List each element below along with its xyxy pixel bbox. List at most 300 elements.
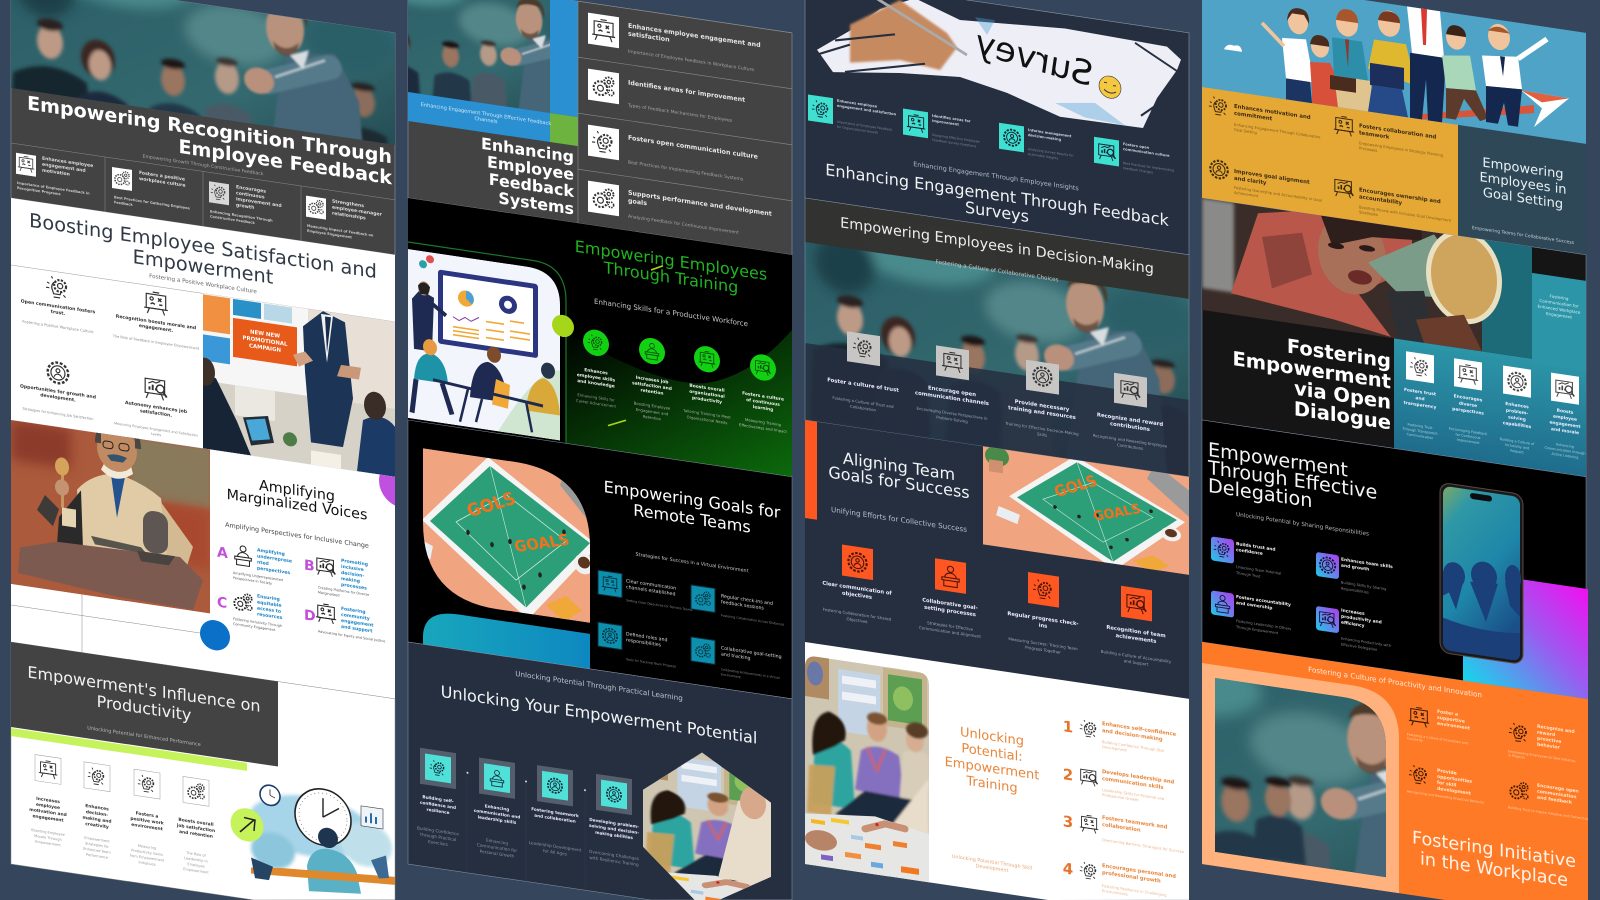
- subtitle: Enhancing Engagement Through Effective Feedback: [421, 102, 551, 127]
- cards row: improvement and: [236, 196, 282, 209]
- option B: processes: [341, 582, 367, 592]
- subtitle: Channels: [474, 116, 498, 125]
- item: open communication: Fostering a Positive Workplace Culture: [22, 320, 94, 334]
- item 1: Unlocking Team Potential: [1236, 565, 1281, 576]
- item 2: [83, 762, 111, 860]
- point 3: Fosters teamwork and: [1102, 815, 1168, 831]
- subtitle: Unlocking Potential by Sharing Responsibilities: [1236, 512, 1369, 538]
- item 2: Encouraging Diverse Perspectives in: [917, 406, 988, 421]
- card 2: Feedback Survey Questions: [932, 138, 977, 148]
- card 4: [1094, 137, 1174, 178]
- slide: Boosting Employee Satisfaction: [11, 198, 395, 477]
- item 1: confidence: [1236, 547, 1263, 557]
- item 4: employee: [1553, 413, 1577, 423]
- item 3: [1211, 590, 1291, 637]
- item 4: and Support: [1124, 658, 1149, 667]
- item 3: Fosters accountability: [1236, 594, 1291, 608]
- item 3: Initiatives: [138, 860, 156, 867]
- item 2: [1316, 552, 1393, 598]
- step 4: with Resilience Training: [589, 855, 639, 867]
- item 1: Increases: [36, 796, 60, 805]
- option A: perspectives: [257, 565, 290, 576]
- side note: Fostering: [1550, 293, 1569, 301]
- step 3: organizational: [689, 389, 725, 400]
- blue dot: [200, 618, 230, 652]
- item 4: Collaborative goal-setting: [721, 645, 782, 660]
- cards row: Strengthens: [332, 199, 364, 209]
- point 2: Develops leadership and: [1102, 769, 1175, 786]
- cards row: growth: [236, 202, 254, 211]
- title: Empowerment: [945, 755, 1039, 784]
- item: open communication: Open communication fosters: [21, 298, 95, 315]
- title: Through Training: [603, 258, 738, 297]
- item 3: Enhances: [1505, 401, 1529, 410]
- point 3: Overcoming Barriers: Strategies for Success: [1102, 838, 1184, 854]
- item 2: feedback sessions: [721, 599, 764, 612]
- subtitle: Unlocking Potential Through Practical Learning: [515, 669, 683, 703]
- slide: Aligning Team Goals for Success: [805, 420, 1189, 699]
- item 4: Recognition of team: [1106, 625, 1166, 639]
- item 4: [1101, 583, 1172, 670]
- option A: nted: [257, 559, 269, 567]
- subtitle: Fostering a Positive Workplace Culture: [149, 273, 257, 295]
- item 4: [1335, 179, 1452, 228]
- card 1: Enhances employee engagement and: [628, 23, 761, 49]
- photo: goals board: GOLS: [1051, 471, 1100, 501]
- step 1: [576, 327, 617, 409]
- item 1: Fosters trust: [1404, 387, 1436, 398]
- title: Amplifying: [259, 478, 335, 505]
- item 1: [1407, 704, 1471, 750]
- item 4: Effective Delegation: [1341, 643, 1377, 652]
- card 3: Informs management: [1028, 128, 1072, 138]
- item: autonomy: Levels: [151, 432, 161, 437]
- step 4: [739, 351, 787, 434]
- photo: workshop in hexagon: [643, 752, 771, 900]
- illustration: survey brush banner: Survey: [973, 23, 1095, 95]
- step 4: learning: [753, 404, 773, 413]
- item 3: ins: [1039, 623, 1047, 630]
- item 1: Creativity: [1407, 736, 1423, 743]
- step 1: Enhances: [584, 367, 608, 377]
- item 1: engagement: [32, 813, 64, 824]
- option D: engagement: [341, 618, 374, 629]
- option C: C: [217, 595, 227, 612]
- cards row: Enhances employee: [42, 156, 93, 169]
- purple corner circle: [379, 474, 395, 506]
- item 1: commitment: [1234, 111, 1273, 122]
- step 1: Through Practical: [419, 832, 456, 842]
- step 1: Building Confidence: [417, 825, 459, 837]
- card 2: [588, 69, 745, 126]
- item 3: Inclusivity and: [1505, 443, 1529, 450]
- title: Employee Feedback: [178, 135, 393, 190]
- subtitle: Unlocking Potential for Enhanced Performance: [87, 725, 201, 748]
- card 3: [999, 123, 1074, 163]
- title: Empowering Goals for: [604, 477, 781, 522]
- step 2: communication and: [474, 808, 520, 820]
- item 3: Measuring Success: Tracking Team: [1008, 636, 1078, 651]
- step 2: Engagement and: [636, 407, 669, 417]
- accent blocks: [408, 0, 578, 146]
- item 4: [1544, 372, 1586, 461]
- slide: Empowering Recognition Through Employee Feedback: [0, 0, 405, 256]
- option B: [304, 552, 369, 602]
- item 1: supportive: [1437, 715, 1465, 725]
- item 4: Building a Culture of Accountability: [1101, 649, 1172, 664]
- item 4: engagement: [1549, 419, 1581, 430]
- step 4: of continuous: [746, 397, 780, 408]
- option C: resources: [257, 611, 283, 621]
- card 4: Supports performance and development: [628, 190, 772, 218]
- item 1: and: [1415, 395, 1425, 402]
- item 4: Increases: [1341, 608, 1365, 617]
- slide: Empowering Employees in Decision-Making: [804, 198, 1190, 478]
- item 1: Through Transparent: [1401, 427, 1438, 436]
- column 1: [0, 0, 427, 900]
- step 2: leadership skills: [478, 814, 517, 825]
- item 2: Responsibilities: [1341, 587, 1369, 595]
- item 3: responsibilities: [626, 637, 662, 649]
- item 2: Performance: [86, 853, 108, 860]
- title: Empowerment's Influence on: [27, 663, 261, 716]
- item 4: and morale: [1551, 426, 1579, 436]
- card 2: improvement: [932, 119, 959, 127]
- item 1: Goal Setting: [1234, 128, 1257, 135]
- illustration: clock and worker: [249, 778, 395, 900]
- step 3: Tailoring Training to Meet: [682, 408, 731, 420]
- item 4: Empowerment: [183, 867, 209, 875]
- step 1: confidence and: [420, 800, 456, 810]
- cards row: relationships: [332, 211, 366, 222]
- photo: goals board: GOALS: [1092, 502, 1143, 525]
- item: opportunities: development.: [40, 392, 76, 404]
- step 3: [529, 764, 582, 859]
- item 2: perspectives: [1452, 406, 1484, 417]
- card 1: satisfaction: [628, 31, 670, 44]
- item 3: Achievement: [1234, 191, 1259, 198]
- title: Systems: [498, 188, 574, 219]
- item 3: Productivity Gains: [131, 848, 163, 857]
- step 2: Retention: [643, 414, 662, 422]
- item: recognition: [112, 286, 200, 351]
- item 1: Boosting Employee: [31, 828, 65, 837]
- title: Training: [965, 774, 1018, 796]
- cards row: employee-manager: [332, 205, 383, 218]
- title: Employee: [487, 152, 574, 184]
- title: Empowering Employees in Decision-Making: [840, 215, 1154, 278]
- photo: clay figure at microphone: [11, 406, 211, 614]
- step 1: Career Advancement: [576, 398, 617, 409]
- item 2: teamwork: [1359, 130, 1390, 141]
- item: open communication: [21, 272, 95, 334]
- item 2: making and: [83, 815, 111, 825]
- step 4: Fosters a culture: [742, 390, 784, 403]
- item 2: Regular check-ins and: [721, 593, 773, 607]
- item 2: [919, 556, 981, 639]
- title: Fostering: [1287, 335, 1391, 373]
- item 3: [1210, 160, 1322, 208]
- photo: pointing man close-up: [1215, 678, 1386, 878]
- item 1: Clear communication of: [822, 581, 892, 597]
- side note: Engagement: [1546, 311, 1572, 320]
- item 1: Fostering Trust: [1407, 422, 1433, 430]
- photo: goals board in leaf frame: [423, 448, 590, 623]
- item 2: Encourages: [1454, 393, 1483, 404]
- column 2: [408, 0, 792, 900]
- item: autonomy: [114, 374, 198, 443]
- option B: decision-: [341, 570, 364, 579]
- item 3: Measuring: [138, 844, 156, 850]
- point 3: [1063, 809, 1184, 854]
- title: Goal Setting: [1483, 186, 1563, 212]
- amber panel: [1202, 87, 1458, 236]
- item 2: Strategies for: [85, 841, 109, 849]
- title: Fostering Initiative: [1412, 828, 1576, 872]
- cards row: Employee Engagement: [307, 229, 352, 240]
- cards row: engagement and: [42, 162, 86, 174]
- photo: pointing man: [11, 0, 395, 145]
- card 1: for Organizational Growth: [837, 125, 878, 135]
- subtitle: Unlocking Potential Through Skill: [952, 854, 1032, 872]
- item 1: Fostering Collaboration for Shared: [823, 607, 892, 622]
- subtitle: Enhancing Skills for a Productive Workforce: [594, 297, 748, 328]
- item 2: Enhanced Team: [83, 847, 111, 855]
- item 4: Encourage open: [1537, 783, 1579, 795]
- step 1: employee skills: [577, 372, 615, 384]
- item 2: Fostering Collaboration Across Distances: [721, 613, 784, 627]
- item 1: Empowerment: [35, 840, 61, 847]
- item 2: Enhances: [85, 803, 109, 813]
- item 2: behavior: [1537, 742, 1560, 751]
- title: Boosting Employee Satisfaction and: [29, 209, 377, 283]
- point 3: collaboration: [1102, 822, 1141, 834]
- point 2: Professional Growth: [1102, 793, 1139, 802]
- teal title panel: [1458, 125, 1586, 255]
- item 2: [1449, 358, 1487, 446]
- item 3: [1500, 365, 1535, 456]
- item 2: decision-: [86, 809, 108, 818]
- item 2: for Continuous: [1456, 433, 1481, 440]
- slide: Empowering Employees in Goal Setting: [1202, 0, 1586, 255]
- item 3: training and resources: [1008, 405, 1076, 421]
- item 2: Empowerment: [84, 836, 110, 844]
- point 1: and decision-making: [1102, 728, 1163, 743]
- slide: Fostering Initiative in the Workplace: [1202, 642, 1588, 900]
- option C: Fostering Inclusivity Through: [233, 617, 282, 628]
- item 3: Recognizing and Rewarding Proactive Behavior: [1407, 789, 1485, 805]
- item 4: Boosts overall: [178, 817, 214, 828]
- slide: Amplifying Marginalized Voices: [11, 420, 395, 699]
- option B: making: [341, 576, 360, 585]
- step 2: satisfaction and: [632, 380, 672, 392]
- step 1: Exercises: [428, 839, 448, 847]
- card 2: Designing Effective Employee: [932, 133, 980, 144]
- item 3: [598, 622, 676, 669]
- item 3: and clarity: [1234, 176, 1267, 187]
- item 4: Boosting Morale with Inclusive Goal Development: [1359, 205, 1452, 223]
- option B: Creating Platforms for Diverse: [318, 585, 369, 597]
- item 4: [1508, 778, 1588, 821]
- cards row: continuous: [236, 190, 265, 201]
- title: Enhancing Engagement Through Feedback: [825, 160, 1169, 230]
- item 1: Fostering a Culture of Innovation and: [1407, 732, 1468, 745]
- step 2: [632, 335, 672, 423]
- point 1: Enhances self-confidence: [1102, 721, 1177, 738]
- card 2: Identifies areas for improvement: [628, 80, 745, 104]
- title: Productivity: [97, 692, 192, 725]
- option A: underreprese: [257, 553, 292, 565]
- item 1: [822, 542, 892, 628]
- item 4: The Role of: [185, 851, 207, 858]
- option A: Amplifying Underrepresented: [233, 571, 283, 582]
- step 3: for All Ages: [543, 848, 567, 857]
- card 4: [588, 181, 772, 241]
- step 4: Developing problem-: [589, 817, 639, 829]
- item 3: and ownership: [1236, 600, 1272, 611]
- point 4: 4: [1063, 859, 1073, 879]
- photo: goals board: [983, 446, 1189, 575]
- item 1: [1401, 351, 1438, 441]
- option C: access to: [257, 605, 281, 615]
- item 4: Environment: [721, 672, 742, 679]
- orange accent bar: [805, 420, 817, 520]
- item 4: communication: [1537, 789, 1577, 800]
- option C: Community Engagement: [233, 622, 276, 632]
- item 4: and tracking: [721, 651, 751, 662]
- icon: lime arrow badge: [230, 806, 264, 844]
- title: Through Effective: [1207, 456, 1377, 504]
- card 1: engagement and satisfaction: [837, 104, 897, 117]
- item 2: [915, 342, 989, 427]
- title: Potential:: [961, 741, 1023, 765]
- option D: community: [341, 612, 370, 622]
- title: Surveys: [965, 198, 1029, 226]
- item 1: channels established: [626, 584, 675, 598]
- item 2: Problem-Solving: [936, 414, 968, 424]
- item 1: [29, 754, 67, 848]
- item 4: and feedback: [1537, 795, 1573, 806]
- card 2: [903, 109, 980, 149]
- subtitle: Development: [976, 863, 1008, 874]
- title: Empowerment: [1232, 347, 1391, 393]
- title: Empowering: [1482, 156, 1564, 182]
- card 3: [588, 125, 758, 185]
- title: Delegation: [1208, 474, 1312, 512]
- point 4: Fostering Resilience in Challenging: [1102, 884, 1167, 898]
- item 3: from Empowerment: [130, 854, 165, 863]
- cards row: Fosters a positive: [139, 170, 185, 183]
- item 3: Tools for Tracking Team Progress: [625, 657, 676, 669]
- item 1: Through Trust: [1235, 571, 1261, 579]
- option C: Ensuring: [257, 593, 280, 603]
- item 2: Processes: [1359, 146, 1377, 153]
- item 3: Through Empowerment: [1235, 625, 1279, 635]
- item 2: [1334, 115, 1444, 163]
- option D: D: [304, 607, 316, 625]
- photo: pointing man: [805, 242, 1189, 400]
- item 4: Contributions: [1117, 442, 1143, 451]
- item 2: Enhances team skills: [1341, 557, 1393, 570]
- photo: pointing man: [408, 0, 550, 113]
- item 1: Clear communication: [626, 578, 676, 592]
- option B: B: [304, 557, 315, 575]
- option B: Marginalized: [318, 590, 340, 598]
- column 3: [804, 0, 1190, 900]
- cards row: Measuring Impact of Feedback on: [307, 224, 374, 238]
- title: Employees in: [1479, 170, 1567, 198]
- item 2: Encourage open: [928, 385, 976, 398]
- item 3: problem-: [1506, 407, 1528, 417]
- step 2: Communication for: [477, 842, 517, 853]
- photo: goals board in leaf frame: GOALS: [512, 530, 572, 556]
- item 3: environment: [131, 822, 163, 832]
- item 2: Communication and Alignment: [919, 625, 981, 639]
- item 3: Regular progress check-: [1007, 611, 1079, 627]
- slide: Enhancing Employee Feedback Systems: [408, 0, 792, 256]
- cards row: [11, 143, 395, 255]
- step 2: Increases job: [636, 375, 668, 386]
- item 4: [1093, 370, 1168, 455]
- item 1: employee: [36, 802, 60, 811]
- subtitle: Unifying Efforts for Collective Success: [831, 505, 967, 534]
- side note: Communication for: [1539, 298, 1579, 309]
- point 4: Encourages personal and: [1102, 863, 1176, 880]
- item 2: proactive: [1537, 736, 1561, 745]
- item 2: diverse: [1459, 401, 1477, 409]
- option A: Amplifying: [257, 547, 285, 558]
- item 1: environment: [1437, 721, 1471, 732]
- item 1: Setting Clear Objectives for Remote Teams: [626, 598, 693, 612]
- card 3: Actionable Insights: [1028, 152, 1059, 161]
- lower overlay: [805, 343, 1189, 477]
- point 2: Leadership Skills for Personal and: [1102, 788, 1165, 801]
- item 1: [1209, 96, 1321, 145]
- cards row: Enhancing Recognition Through: [210, 209, 273, 223]
- step 4: making abilities: [595, 830, 633, 840]
- card 3: Best Practices for Implementing Feedback Systems: [628, 160, 744, 183]
- illustration: team at whiteboard: [408, 248, 560, 442]
- item: autonomy: Autonomy enhances job: [125, 400, 188, 415]
- slide: Empowering Employees Through Training: [408, 198, 792, 477]
- item 4: Active Listening: [1552, 452, 1578, 460]
- item 4: productivity and: [1341, 614, 1382, 626]
- item 4: Employee: [187, 862, 205, 869]
- item 3: Fostering Ownership and Accountability in Goal: [1234, 186, 1322, 203]
- item 1: Foster a culture of trust: [827, 377, 899, 394]
- point 1: Building Confidence Through Skill: [1102, 740, 1164, 753]
- option D: and support: [341, 624, 373, 635]
- cards row: workplace culture: [139, 176, 185, 189]
- photo: presenter with campaign screen: CAMPAIGN: [249, 343, 281, 354]
- cards row: Importance of Employee Feedback in: [17, 181, 90, 196]
- item 3: Defined roles and: [626, 631, 667, 643]
- item 3: Fosters a: [136, 810, 158, 820]
- item 3: [1407, 763, 1485, 805]
- item: recognition: Recognition boosts morale and: [116, 314, 196, 331]
- item: opportunities: Opportunities for growth and: [20, 383, 96, 401]
- step 3: and collaboration: [534, 813, 576, 824]
- card 1: [588, 13, 761, 74]
- step 1: and knowledge: [577, 378, 615, 390]
- title: Feedback: [489, 170, 574, 201]
- step 2: Enhancing: [485, 803, 509, 812]
- item 1: Builds trust and: [1236, 541, 1276, 553]
- step 4: Overcoming Challenges: [589, 849, 639, 861]
- item 4: Enhancing Productivity with: [1341, 637, 1391, 648]
- title: in the Workplace: [1420, 849, 1568, 891]
- option A: A: [217, 545, 228, 562]
